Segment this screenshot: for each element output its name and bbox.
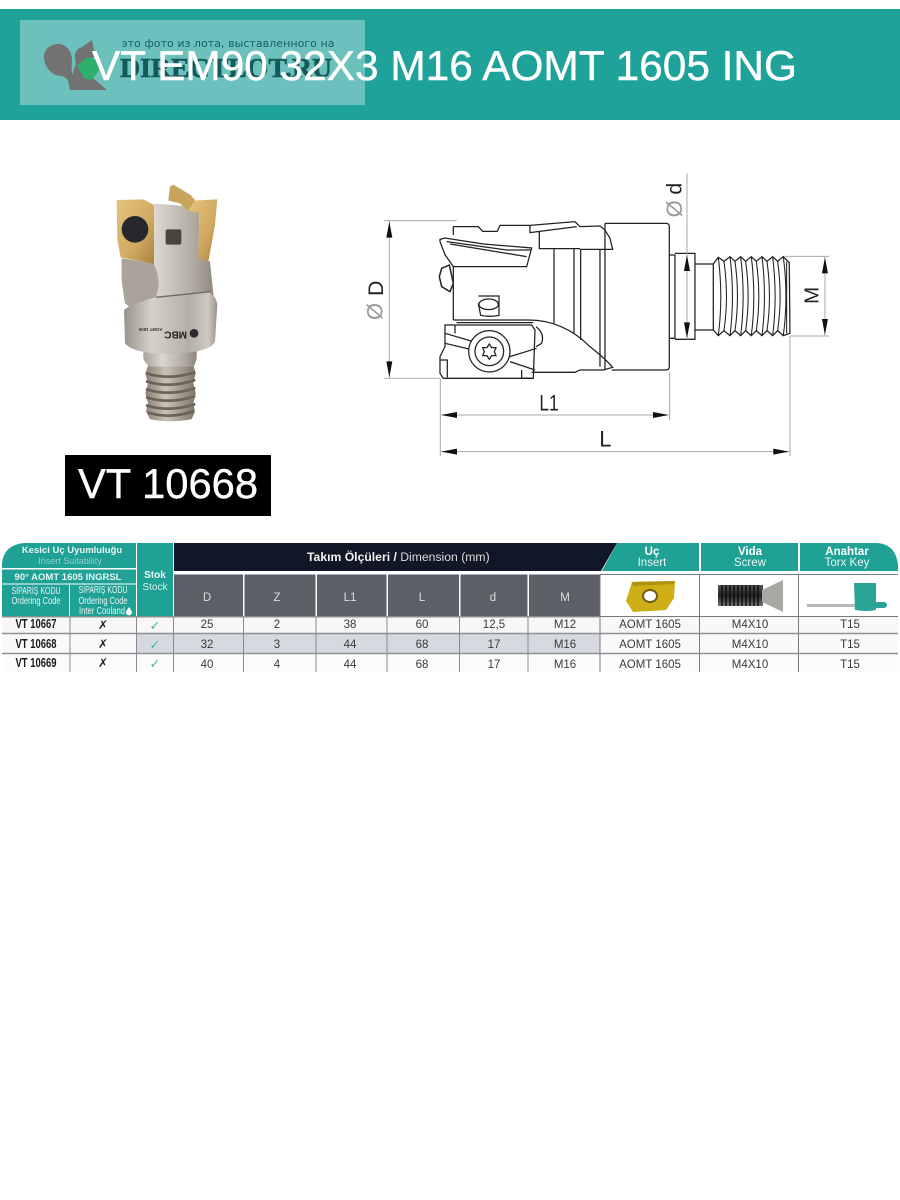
- row: VT 10669: 68: [416, 659, 428, 671]
- table header: insert suitability: [2, 543, 136, 568]
- label: M: M: [801, 287, 824, 304]
- row: VT 10667: T15: [840, 619, 860, 631]
- row: VT 10668: ✓: [150, 638, 160, 653]
- dimension column labels: M: [560, 592, 570, 604]
- row: VT 10667: VT 10667: [16, 617, 57, 631]
- gold insert top: [168, 185, 195, 211]
- product photo: milling cutter: [117, 185, 217, 421]
- table header: dimension band: [174, 543, 617, 571]
- table header: screw: [701, 543, 798, 571]
- row: VT 10667: M4X10: [732, 619, 768, 631]
- table header: insert: [602, 543, 699, 571]
- row: VT 10669: AOMT 1605: [619, 659, 681, 671]
- logo gear: [190, 329, 198, 338]
- table header: insert suitability: Kesici Uç Uyumluluğu: [22, 545, 122, 556]
- label: diameter d: Ø: [662, 200, 687, 217]
- title: VT EM90 32X3 M16 AOMT 1605 ING: [92, 42, 797, 89]
- row: VT 10668: VT 10668: [16, 637, 57, 651]
- row: VT 10668: 3: [274, 639, 280, 651]
- row: VT 10669: ✗: [98, 656, 108, 670]
- row: VT 10668: 32: [201, 639, 213, 651]
- row: VT 10669: ✓: [150, 657, 160, 672]
- dimension column labels: [203, 592, 570, 604]
- row: VT 10667: M12: [554, 619, 576, 631]
- row: VT 10669: 17: [488, 659, 500, 671]
- table header: ordering code: [2, 584, 69, 616]
- table header: stock: [137, 543, 173, 616]
- watermark panel: [20, 20, 365, 105]
- image cell borders: [600, 574, 898, 672]
- row: VT 10669: VT 10669: [16, 656, 57, 670]
- row: VT 10667: AOMT 1605: [619, 619, 681, 631]
- watermark caption: это фото из лота, выставленного на: [122, 37, 334, 50]
- table header: ordering code inter coolant: Ordering Code: [78, 596, 128, 607]
- icon: screw: [718, 580, 783, 612]
- thread: [145, 365, 196, 421]
- engraved size: AOMT 1605: [138, 327, 162, 332]
- label: diameter D: Ø: [363, 303, 388, 320]
- label: diameter d: d: [662, 183, 686, 195]
- row: VT 10667: 2: [274, 619, 280, 631]
- table header: ordering code: Ordering Code: [12, 596, 61, 607]
- row: VT 10668: AOMT 1605: [619, 639, 681, 651]
- icon: squirrel: [44, 40, 107, 90]
- dimension lines: [384, 173, 829, 456]
- coolant port: [478, 296, 499, 316]
- row: VT 10669: 40: [201, 659, 213, 671]
- row: VT 10669: [16, 656, 860, 672]
- flute shadow: [122, 258, 159, 310]
- neck: [143, 350, 197, 367]
- row: VT 10667: 12,5: [483, 619, 505, 631]
- technical drawing: [363, 173, 829, 456]
- table header: ordering code inter coolant: SİPARİŞ KODU: [78, 583, 128, 596]
- gold insert right: [188, 199, 217, 262]
- table header: torx key: Anahtar: [825, 546, 869, 558]
- table header: ordering code inter coolant: Inter Cooland: [79, 606, 125, 617]
- header banner: [0, 9, 900, 120]
- row: VT 10668: M16: [554, 639, 576, 651]
- cutter outline: [439, 222, 790, 378]
- row: VT 10668: T15: [840, 639, 860, 651]
- row: VT 10667: 38: [344, 619, 356, 631]
- row: VT 10669: M4X10: [732, 659, 768, 671]
- insert screw: [122, 216, 148, 243]
- row: VT 10668: 17: [488, 639, 500, 651]
- collar groove: [156, 292, 210, 297]
- row: VT 10669: 4: [274, 659, 281, 671]
- insert screw: [469, 331, 510, 372]
- gold insert left: [117, 199, 154, 264]
- row: VT 10667: 25: [201, 619, 213, 631]
- specification table: [2, 543, 898, 672]
- row: VT 10667: ✓: [150, 619, 160, 634]
- table header: dimension band: Takım Ölçüleri / Dimension (mm): [307, 549, 490, 564]
- product code badge: [65, 455, 271, 516]
- icon: torx key: [807, 583, 887, 611]
- row: VT 10667: ✗: [98, 618, 108, 632]
- coolant hole: [166, 229, 181, 245]
- row: VT 10667: [16, 617, 860, 634]
- dimension column labels: d: [490, 592, 496, 604]
- table header: screw: Vida: [738, 546, 763, 558]
- table header: stock: Stock: [142, 582, 169, 593]
- thread profile: [713, 257, 790, 336]
- row: VT 10668: ✗: [98, 637, 108, 651]
- label: diameter D: D: [364, 281, 388, 296]
- table header: torx key: Torx Key: [825, 557, 870, 569]
- table header: ordering code inter coolant: [70, 583, 136, 617]
- label: diameter D: [363, 281, 388, 320]
- dimension column labels: L: [419, 592, 426, 604]
- product code badge: VT 10668: [78, 460, 258, 507]
- label: diameter d: [662, 183, 687, 217]
- table row lines: [2, 617, 898, 654]
- table header: insert type: [2, 570, 136, 584]
- table header: insert suitability: Insert Suitability: [38, 556, 102, 566]
- row: VT 10668: [16, 637, 860, 653]
- label: L: L: [599, 427, 612, 452]
- row: VT 10669: M16: [554, 659, 576, 671]
- table header: screw: Screw: [734, 557, 767, 569]
- table row backgrounds: [2, 617, 898, 672]
- table header: insert: Uç: [645, 546, 660, 558]
- row: VT 10668: M4X10: [732, 639, 768, 651]
- row: VT 10669: 44: [344, 659, 357, 671]
- collar: [124, 292, 217, 354]
- table header: stock: Stok: [144, 570, 166, 581]
- dimension column headers: [174, 574, 600, 616]
- row: VT 10668: 44: [344, 639, 357, 651]
- label: L1: L1: [539, 391, 559, 416]
- watermark brand name: DIRECTLOT.RU: [120, 53, 332, 83]
- dimension column labels: D: [203, 592, 211, 604]
- table column lines: [70, 617, 528, 672]
- dimension column labels: L1: [344, 592, 356, 604]
- cutter upper body: [122, 203, 215, 303]
- row: VT 10667: 60: [416, 619, 428, 631]
- icon: insert: [626, 581, 675, 612]
- table header: torx key: [800, 543, 898, 571]
- row: VT 10668: 68: [416, 639, 428, 651]
- dimension column labels: Z: [273, 592, 281, 604]
- dimension arrows: [386, 222, 828, 455]
- table header: ordering code: SİPARİŞ KODU: [12, 584, 60, 597]
- table header: insert type: 90° AOMT 1605 INGRSL: [15, 572, 122, 583]
- MBC logo: MBC: [164, 328, 187, 339]
- row: VT 10669: T15: [840, 659, 860, 671]
- table header: insert: Insert: [638, 557, 667, 569]
